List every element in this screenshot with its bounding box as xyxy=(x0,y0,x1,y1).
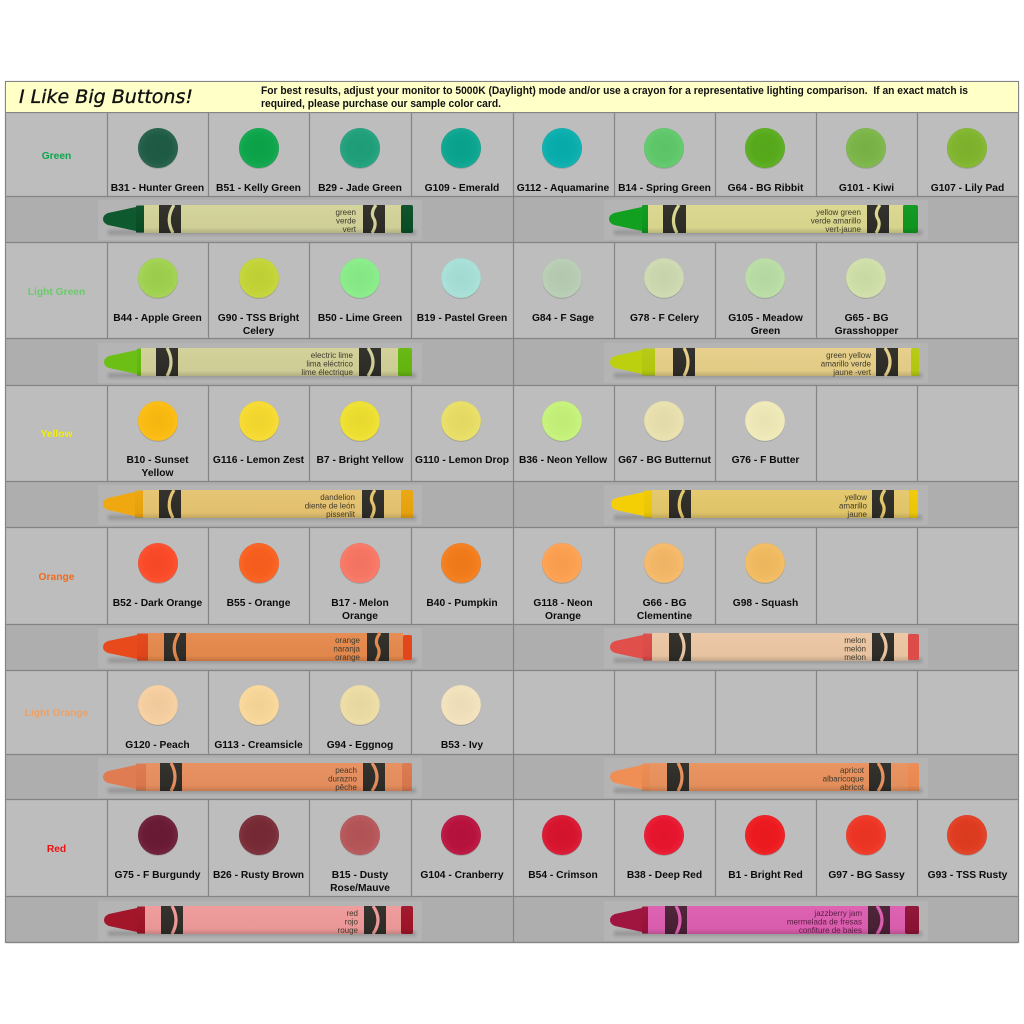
swatch: B14 Spring Green: B14 - Spring Green xyxy=(618,183,711,194)
swatch: G105 Meadow Green: Green xyxy=(751,326,780,337)
crayon: jazzberry jam xyxy=(604,901,928,941)
crayon: green yellow: green yellow xyxy=(826,351,871,360)
swatch: B26 Rusty Brown: B26 - Rusty Brown xyxy=(213,870,304,881)
swatch: G66 BG Clementine: Clementine xyxy=(637,611,692,622)
swatch: B10 Sunset Yellow xyxy=(126,401,189,479)
swatch: B54 Crimson: B54 - Crimson xyxy=(528,870,598,881)
swatch: G93 TSS Rusty: G93 - TSS Rusty xyxy=(928,870,1008,881)
swatch: G97 BG Sassy xyxy=(828,815,905,881)
swatch: B53 Ivy xyxy=(441,685,483,751)
swatch: B15 Dusty Rose/Mauve xyxy=(330,815,390,894)
crayon: red: rojo xyxy=(345,918,359,926)
swatch: G94 Eggnog: G94 - Eggnog xyxy=(327,740,393,751)
swatch: G110 Lemon Drop: G110 - Lemon Drop xyxy=(415,455,509,466)
crayon: yellow green: vert-jaune xyxy=(825,225,862,234)
crayon: yellow: jaune xyxy=(846,510,868,519)
swatch: B55 Orange: B55 - Orange xyxy=(227,598,291,609)
swatch: G76 F Butter xyxy=(732,401,799,466)
crayon: green yellow xyxy=(604,343,928,383)
crayon: green xyxy=(98,200,422,240)
crayon: green yellow: amarillo verde xyxy=(821,360,872,368)
swatch: B19 Pastel Green: B19 - Pastel Green xyxy=(417,313,507,324)
crayon: yellow green xyxy=(604,200,928,240)
crayon: yellow: amarillo xyxy=(839,502,868,510)
crayon: green: verde xyxy=(336,216,357,226)
crayon: melon xyxy=(604,628,928,668)
crayon: dandelion: dandelion xyxy=(320,493,355,502)
category: Light Orange: Light Orange xyxy=(25,708,89,719)
crayon: melon: melón xyxy=(844,644,866,654)
swatch: G65 BG Grasshopper xyxy=(835,258,898,337)
crayon: red: red xyxy=(346,909,358,918)
swatch: G105 Meadow Green xyxy=(728,258,803,337)
swatch: G94 Eggnog xyxy=(327,685,393,751)
swatch: B38 Deep Red xyxy=(627,815,702,881)
crayon: orange: orange xyxy=(335,636,361,645)
crayon: peach: pêche xyxy=(335,783,358,792)
swatch: G84 F Sage: G84 - F Sage xyxy=(532,313,594,324)
swatch: B1 Bright Red xyxy=(728,815,803,881)
swatch: G110 Lemon Drop xyxy=(415,401,509,466)
swatch: B36 Neon Yellow xyxy=(519,401,607,466)
swatch: G112 Aquamarine: G112 - Aquamarine xyxy=(517,183,610,194)
crayon: jazzberry jam: mermelada de fresas xyxy=(787,918,862,926)
swatch: B52 Dark Orange xyxy=(113,543,203,609)
swatch: G84 F Sage xyxy=(532,258,594,324)
swatch: G90 TSS Bright Celery: G90 - TSS Bright xyxy=(218,313,300,324)
swatch: G107 Lily Pad: G107 - Lily Pad xyxy=(931,183,1004,194)
swatch: G101 Kiwi xyxy=(839,128,894,194)
crayon: dandelion: pissenlit xyxy=(326,510,356,519)
crayon: apricot xyxy=(604,758,928,798)
swatch: G97 BG Sassy: G97 - BG Sassy xyxy=(828,870,905,881)
swatch: B53 Ivy: B53 - Ivy xyxy=(441,740,483,751)
swatch: G98 Squash: G98 - Squash xyxy=(733,598,798,609)
swatch: G104 Cranberry xyxy=(420,815,504,881)
swatch: G109 Emerald xyxy=(425,128,499,194)
swatch: G75 F Burgundy xyxy=(114,815,201,881)
header note: required, please purchase our sample color card. xyxy=(261,98,501,110)
swatch: B10 Sunset Yellow: B10 - Sunset xyxy=(126,455,189,466)
crayon: yellow: yellow xyxy=(845,493,867,502)
swatch: B26 Rusty Brown xyxy=(213,815,304,881)
crayon: melon: melon xyxy=(844,636,866,645)
crayon: electric lime: lime électrique xyxy=(301,368,354,377)
title: I Like Big Buttons! xyxy=(19,86,193,108)
swatch: G118 Neon Orange: Orange xyxy=(545,611,581,622)
crayon: peach: peach xyxy=(335,766,357,775)
crayon: green: green xyxy=(336,208,356,217)
swatch: G118 Neon Orange: G118 - Neon xyxy=(533,598,593,609)
swatch: B17 Melon Orange xyxy=(331,543,389,622)
swatch: B55 Orange xyxy=(227,543,291,609)
swatch: G78 F Celery: G78 - F Celery xyxy=(630,313,699,324)
swatch: G101 Kiwi: G101 - Kiwi xyxy=(839,183,894,194)
crayon: dandelion xyxy=(98,485,422,525)
swatch: G113 Creamsicle: G113 - Creamsicle xyxy=(214,740,303,751)
swatch: G75 F Burgundy: G75 - F Burgundy xyxy=(114,870,201,881)
crayon: yellow green: yellow green xyxy=(816,208,861,217)
swatch: B10 Sunset Yellow: Yellow xyxy=(142,468,173,479)
crayon: apricot: albaricoque xyxy=(823,774,865,784)
swatch: G78 F Celery xyxy=(630,258,699,324)
category: Light Green: Light Green xyxy=(28,287,85,298)
swatch: G67 BG Butternut: G67 - BG Butternut xyxy=(618,455,711,466)
swatch: G90 TSS Bright Celery xyxy=(218,258,300,337)
swatch: G66 BG Clementine: G66 - BG xyxy=(643,598,686,609)
swatch: B15 Dusty Rose/Mauve: Rose/Mauve xyxy=(330,883,390,894)
crayon: red: rouge xyxy=(338,926,359,935)
swatch: B15 Dusty Rose/Mauve: B15 - Dusty xyxy=(332,870,388,881)
swatch: G66 BG Clementine xyxy=(637,543,692,622)
swatch: B36 Neon Yellow: B36 - Neon Yellow xyxy=(519,455,607,466)
swatch: B40 Pumpkin xyxy=(426,543,498,609)
category: Yellow: Yellow xyxy=(41,429,72,440)
swatch: B54 Crimson xyxy=(528,815,598,881)
swatch: B7 Bright Yellow xyxy=(317,401,404,466)
header note xyxy=(261,85,968,110)
category: Red: Red xyxy=(47,844,66,855)
crayon: jazzberry jam: jazzberry jam xyxy=(813,909,862,918)
header banner xyxy=(6,82,1018,112)
swatch: G76 F Butter: G76 - F Butter xyxy=(732,455,799,466)
crayon: orange: orange xyxy=(335,653,361,662)
swatch: B40 Pumpkin: B40 - Pumpkin xyxy=(426,598,498,609)
swatch: G93 TSS Rusty xyxy=(928,815,1008,881)
swatch: B51 Kelly Green xyxy=(216,128,301,194)
swatch: B31 Hunter Green: B31 - Hunter Green xyxy=(111,183,204,194)
swatch: B29 Jade Green: B29 - Jade Green xyxy=(318,183,402,194)
crayon: orange: naranja xyxy=(333,644,361,654)
swatch: G116 Lemon Zest: G116 - Lemon Zest xyxy=(213,455,305,466)
crayon: yellow xyxy=(604,485,928,525)
category: Orange: Orange xyxy=(39,572,75,583)
crayon: red xyxy=(98,901,422,941)
swatch: B31 Hunter Green xyxy=(111,128,204,194)
swatch: G104 Cranberry: G104 - Cranberry xyxy=(420,870,504,881)
swatch: B44 Apple Green: B44 - Apple Green xyxy=(113,313,202,324)
crayon: peach xyxy=(98,758,422,798)
swatch: B38 Deep Red: B38 - Deep Red xyxy=(627,870,702,881)
swatch: B1 Bright Red: B1 - Bright Red xyxy=(728,870,803,881)
crayon: apricot: abricot xyxy=(840,783,865,792)
swatch: B52 Dark Orange: B52 - Dark Orange xyxy=(113,598,203,609)
crayon: peach: durazno xyxy=(328,774,358,784)
category: Green: Green xyxy=(42,151,71,162)
swatch: G120 Peach: G120 - Peach xyxy=(125,740,190,751)
swatch: G65 BG Grasshopper: Grasshopper xyxy=(835,326,898,337)
crayon: green: vert xyxy=(343,225,357,234)
swatch: B50 Lime Green xyxy=(318,258,402,324)
swatch: B14 Spring Green xyxy=(618,128,711,194)
swatch: G116 Lemon Zest xyxy=(213,401,305,466)
swatch: G120 Peach xyxy=(125,685,190,751)
crayon: jazzberry jam: confiture de baies xyxy=(799,926,862,935)
swatch: B17 Melon Orange: Orange xyxy=(342,611,378,622)
crayon: green yellow: jaune -vert xyxy=(832,368,872,377)
swatch: G112 Aquamarine xyxy=(517,128,610,194)
crayon: apricot: apricot xyxy=(840,766,865,775)
crayon: yellow green: verde amarillo xyxy=(811,216,862,226)
swatch: B7 Bright Yellow: B7 - Bright Yellow xyxy=(317,455,404,466)
swatch: G109 Emerald: G109 - Emerald xyxy=(425,183,499,194)
swatch: G107 Lily Pad xyxy=(931,128,1004,194)
swatch: G64 BG Ribbit: G64 - BG Ribbit xyxy=(728,183,804,194)
crayon: orange xyxy=(98,628,422,668)
crayon: electric lime: electric lime xyxy=(311,351,354,360)
crayon: electric lime: lima eléctrico xyxy=(306,360,354,368)
crayon: electric lime xyxy=(98,343,422,383)
swatch: G67 BG Butternut xyxy=(618,401,711,466)
swatch: B51 Kelly Green: B51 - Kelly Green xyxy=(216,183,301,194)
swatch: G98 Squash xyxy=(733,543,798,609)
swatch: G113 Creamsicle xyxy=(214,685,303,751)
crayon: dandelion: diente de león xyxy=(305,502,355,510)
swatch: B44 Apple Green xyxy=(113,258,202,324)
crayon: melon: melon xyxy=(844,653,866,662)
swatch: G118 Neon Orange xyxy=(533,543,593,622)
swatch: B50 Lime Green: B50 - Lime Green xyxy=(318,313,402,324)
swatch: B17 Melon Orange: B17 - Melon xyxy=(331,598,389,609)
swatch: B29 Jade Green xyxy=(318,128,402,194)
swatch: G90 TSS Bright Celery: Celery xyxy=(243,326,274,337)
swatch: G64 BG Ribbit xyxy=(728,128,804,194)
swatch: G105 Meadow Green: G105 - Meadow xyxy=(728,313,803,324)
header note: For best results, adjust your monitor to 5000K (Daylight) mode and/or use a crayon for a representative lighting comparison. If an exact match is xyxy=(261,85,968,97)
swatch: B19 Pastel Green xyxy=(417,258,507,324)
swatch: G65 BG Grasshopper: G65 - BG xyxy=(845,313,888,324)
